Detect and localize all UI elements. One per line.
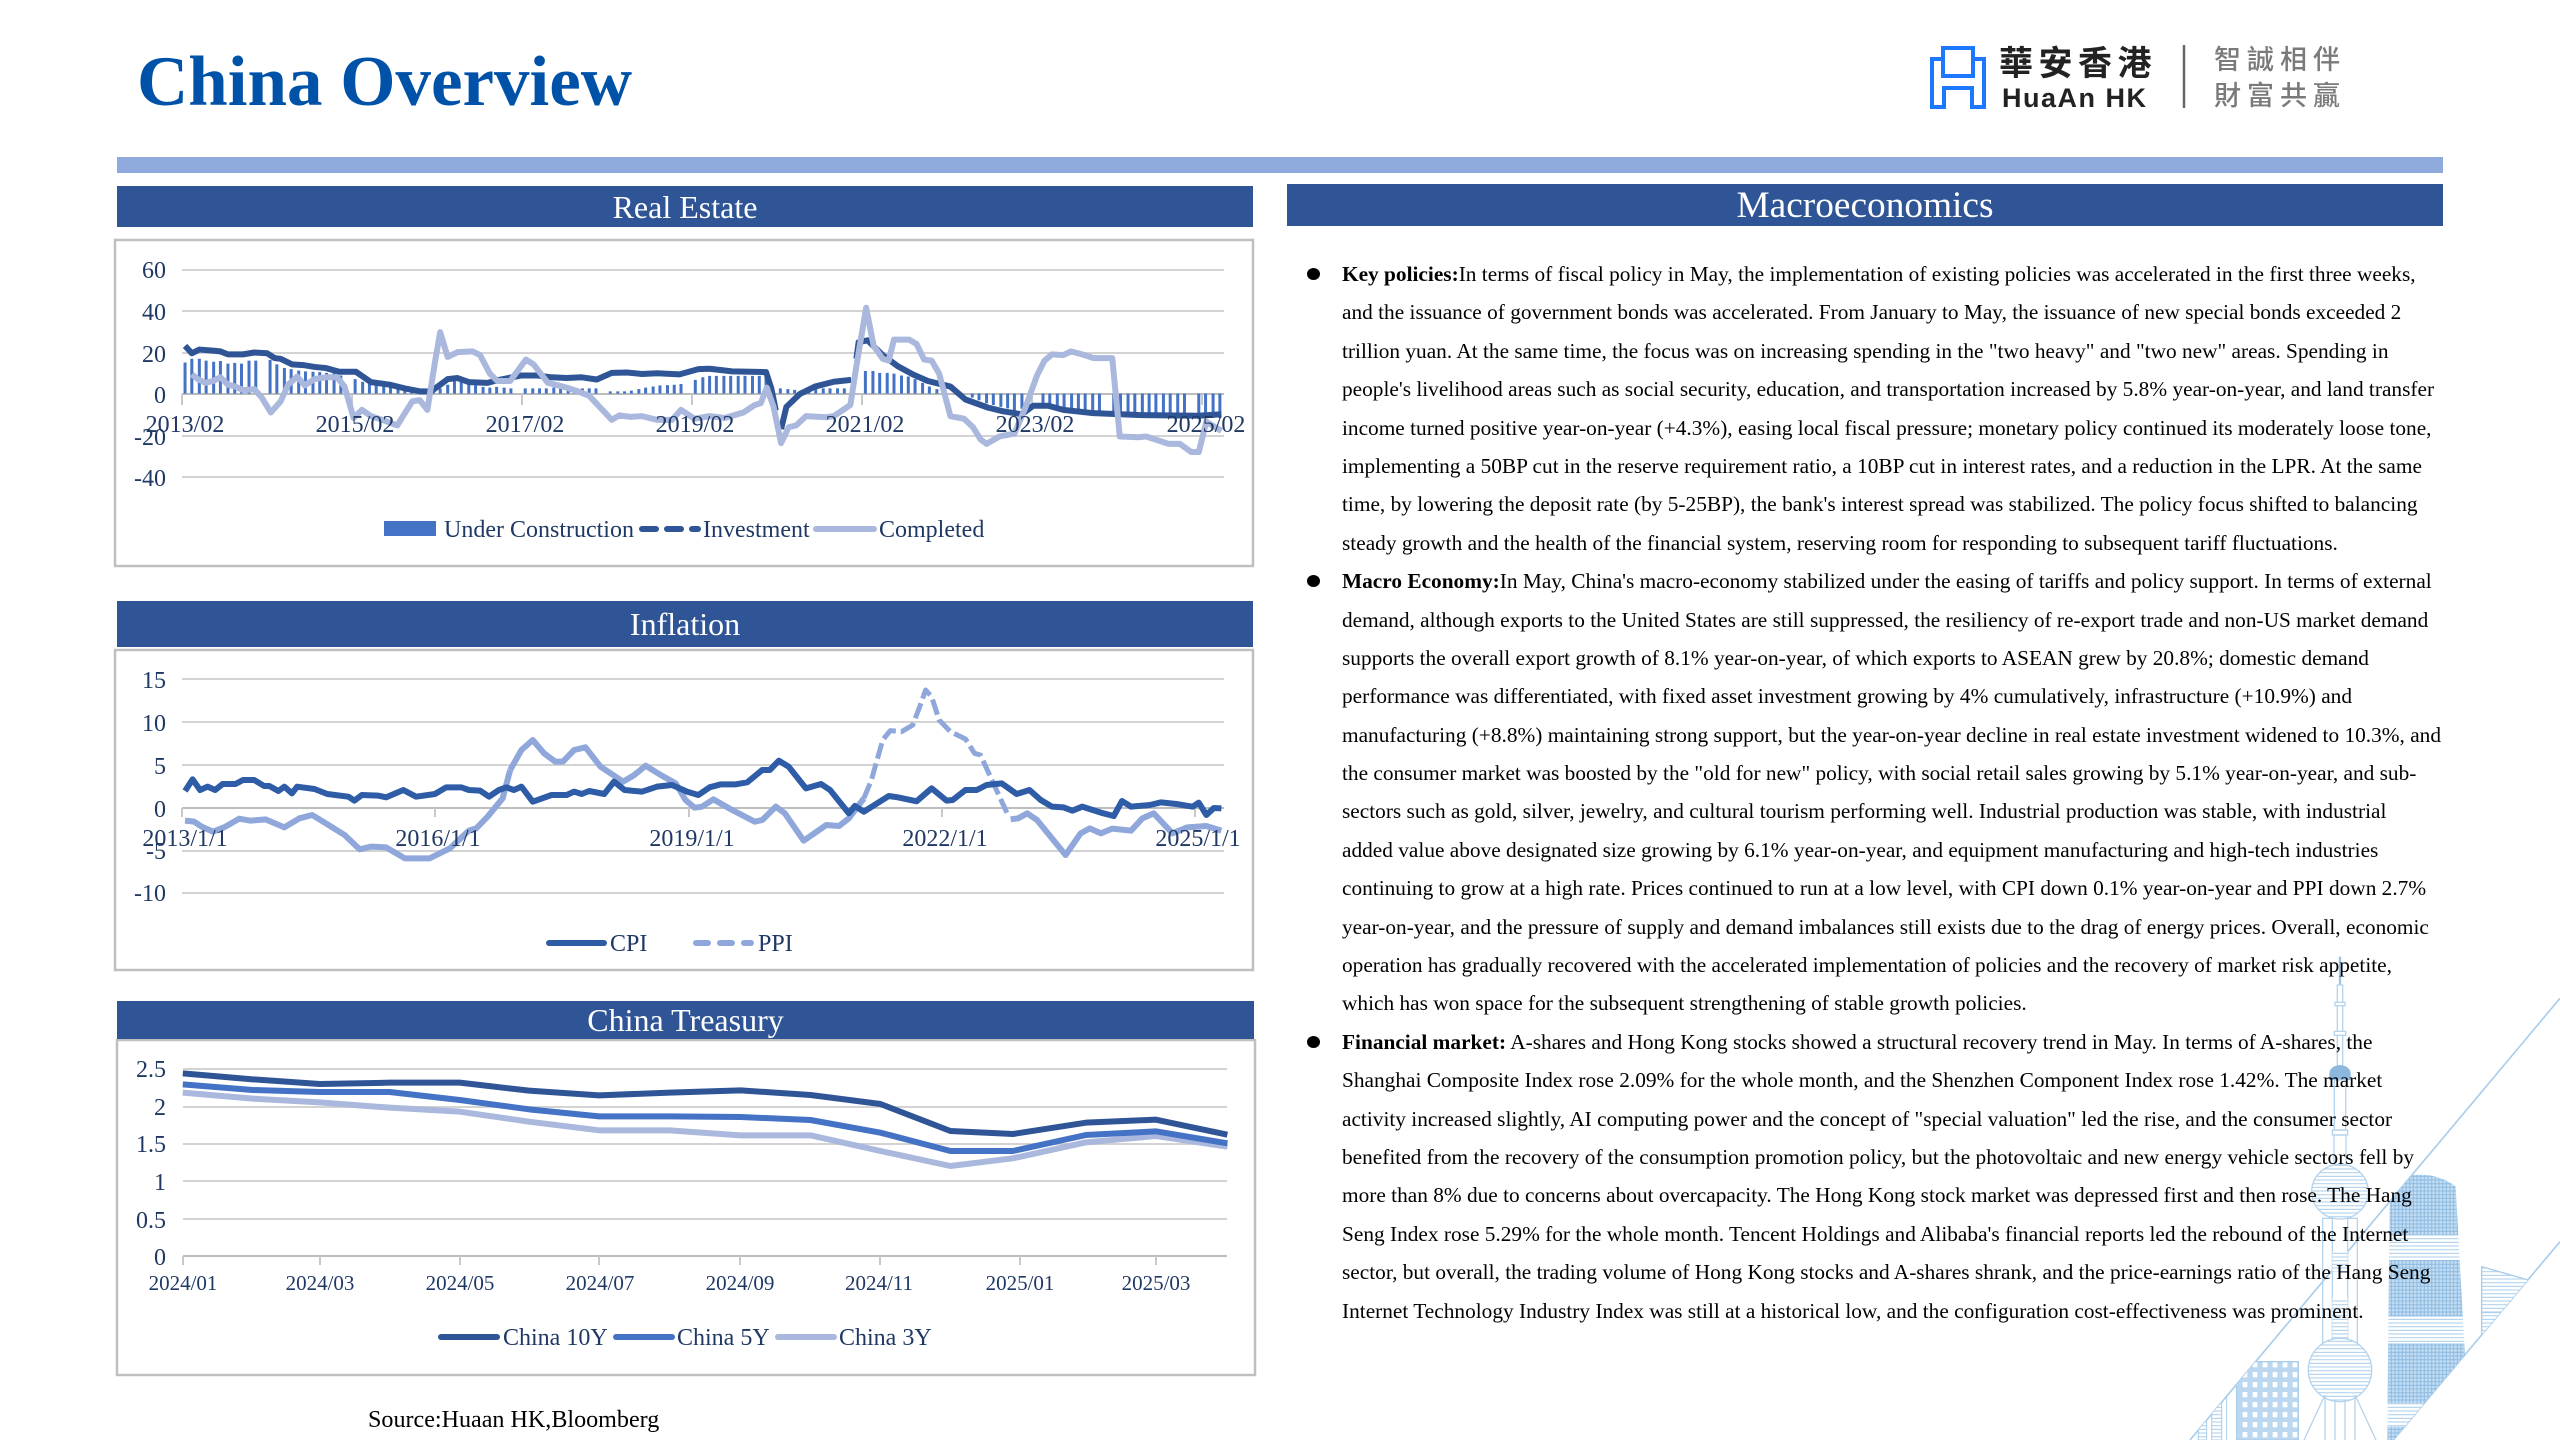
y axis labels — [134, 668, 166, 907]
x axis labels — [142, 826, 1241, 852]
y axis labels: 2.5 — [136, 1057, 166, 1083]
gridlines — [182, 679, 1224, 893]
y axis labels: 0 — [154, 383, 166, 409]
x axis labels — [146, 412, 1245, 438]
paragraph: macro economy: which has won space for the subsequent strengthening of stable growth policies. — [1342, 991, 2027, 1015]
heading: inflation — [117, 601, 1253, 647]
logo: HuaAn HK — [1932, 36, 2346, 113]
legend: China 5Y — [677, 1325, 770, 1351]
gridlines — [183, 1069, 1227, 1265]
paragraph: financial market: Financial market: A-shares and Hong Kong stocks showed a structural recovery trend in May. In terms of A-shares, the — [1342, 1030, 2372, 1054]
heading: China treasury: China Treasury — [587, 1002, 784, 1038]
logo slogan: 財富共贏 — [2214, 74, 2346, 113]
panel: China treasury chart — [117, 1040, 1255, 1375]
y axis labels: 15 — [142, 668, 166, 694]
x axis labels: 2024/11 — [845, 1271, 913, 1295]
x axis labels: 2025/02 — [1167, 412, 1245, 438]
diagonal frame line lower — [2393, 1242, 2560, 1440]
y axis labels: -5 — [146, 839, 166, 865]
paragraph: key policies: trillion yuan. At the same time, the focus was on increasing spending in the "two heavy" and "two new" areas. Spending in — [1342, 339, 2389, 363]
legend: Investment — [703, 517, 810, 543]
x axis labels: 2025/01 — [986, 1271, 1054, 1295]
paragraph: financial market: activity increased slightly, AI computing power and the concept of "special valuation" led the rise, and the consumer sector — [1342, 1107, 2392, 1131]
x axis labels: 2017/02 — [486, 412, 564, 438]
legend: PPI — [758, 931, 793, 957]
legend: China 3Y — [839, 1325, 932, 1351]
x axis labels: 2025/1/1 — [1155, 826, 1241, 852]
y axis labels: -40 — [134, 466, 166, 492]
x axis labels: 2023/02 — [996, 412, 1074, 438]
paragraph: macro economy: year-on-year, and the pressure of supply and demand imbalances still exists due to the drag of energy prices. Overall, economic — [1342, 915, 2429, 939]
x axis labels: 2013/02 — [146, 412, 224, 438]
paragraph: financial market: Shanghai Composite Index rose 2.09% for the whole month, and the Shenzhen Component Index rose 1.42%. The market — [1342, 1068, 2382, 1092]
x axis labels — [149, 1271, 1190, 1295]
heading: macroeconomics — [1287, 184, 2443, 226]
paragraph: key policies: income turned positive year-on-year (+4.3%), easing local fiscal pressure; monetary policy continued its moderately loose tone, — [1342, 416, 2432, 440]
x axis labels: 2019/02 — [656, 412, 734, 438]
y axis labels: 1 — [154, 1170, 166, 1196]
legend — [384, 517, 984, 543]
paragraph: financial market: sector, but overall, the trading volume of Hong Kong stocks and A-shares shrank, and the price-earnings ratio of the Hang Seng — [1342, 1260, 2430, 1284]
y axis labels: 0 — [154, 1245, 166, 1271]
series: investment — [185, 340, 1221, 429]
paragraph: macro economy: sectors such as gold, silver, jewelry, and cultural tourism performing well. Industrial production was stable, with industrial — [1342, 799, 2386, 823]
title: China Overview — [137, 43, 632, 121]
x axis labels: 2024/09 — [706, 1271, 774, 1295]
paragraph: macro economy: manufacturing (+8.8%) maintaining strong support, but the year-on-year decline in real estate investment widened to 10.3%, and — [1342, 723, 2441, 747]
y axis labels: 1.5 — [136, 1132, 166, 1158]
series: China 10Y — [183, 1073, 1227, 1135]
panel: inflation chart — [115, 650, 1253, 970]
y axis labels: 0.5 — [136, 1208, 166, 1234]
chart frame — [117, 1040, 1255, 1375]
paragraph: financial market: benefited from the recovery of the consumption promotion policy, but the photovoltaic and new energy vehicle sectors fell by — [1342, 1145, 2414, 1169]
diagonal frame line upper — [2190, 998, 2560, 1440]
paragraph: financial market: Internet Technology Industry Index was still at a historical low, and the configuration cost-effectiveness was prominent. — [1342, 1299, 2364, 1323]
legend — [549, 931, 793, 957]
paragraph: macro economy: demand, although exports to the United States are still suppressed, the resiliency of re-export trade and non-US market demand — [1342, 608, 2428, 632]
paragraph: key policies: steady growth and the health of the financial system, reserving room for responding to subsequent tariff fluctuations. — [1342, 531, 2338, 555]
y axis labels: 40 — [142, 300, 166, 326]
paragraph: financial market — [1307, 1030, 2430, 1323]
paragraph: macro economy: continuing to grow at a high rate. Prices continued to run at a low level, with CPI down 0.1% year-on-year and PPI down 2.7% — [1342, 876, 2426, 900]
logo slogan: 智誠相伴 — [2214, 38, 2346, 77]
panel: real estate chart — [115, 240, 1253, 566]
heading: inflation: Inflation — [630, 606, 740, 642]
series: completed — [192, 308, 1221, 452]
paragraph: key policies: time, by lowering the deposit rate (by 5-25BP), the bank's interest spread was stabilized. The policy focus shifted to balancing — [1342, 492, 2418, 516]
y axis labels: -10 — [134, 881, 166, 907]
text block: macroeconomics commentary — [1307, 262, 2441, 1323]
y axis labels: 60 — [142, 258, 166, 284]
logo name English: HuaAn HK — [2002, 83, 2148, 113]
x axis labels: 2024/01 — [149, 1271, 217, 1295]
legend: CPI — [610, 931, 647, 957]
x axis labels: 2013/1/1 — [142, 826, 228, 852]
x axis labels: 2022/1/1 — [902, 826, 988, 852]
series: CPI — [185, 761, 1221, 816]
y axis labels: 5 — [154, 754, 166, 780]
x axis labels: 2024/07 — [566, 1271, 634, 1295]
paragraph: financial market: Seng Index rose 5.29% for the whole month. Tencent Holdings and Alibaba's financial reports led the rebound of the Internet — [1342, 1222, 2408, 1246]
paragraph: financial market: more than 8% due to concerns about overcapacity. The Hong Kong stock market was depressed first and then rose. The Hang — [1342, 1183, 2412, 1207]
x axis labels: 2016/1/1 — [395, 826, 481, 852]
paragraph: macro economy: operation has gradually recovered with the accelerated implementation of policies and the recovery of market risk appetite, — [1342, 953, 2392, 977]
y axis labels: -20 — [134, 425, 166, 451]
x axis labels: 2019/1/1 — [649, 826, 735, 852]
paragraph: macro economy: added value above designated size growing by 6.1% year-on-year, and equipment manufacturing and high-tech industries — [1342, 838, 2378, 862]
series: PPI — [185, 690, 1221, 858]
heading: real estate: Real Estate — [613, 189, 757, 225]
y axis labels: 20 — [142, 342, 166, 368]
paragraph: key policies: Key policies:In terms of fiscal policy in May, the implementation of existing policies was accelerated in the first three weeks, — [1342, 262, 2416, 286]
gridlines — [182, 270, 1224, 477]
y axis labels — [134, 258, 166, 492]
building: right small block — [2482, 1267, 2528, 1337]
building: Oriental Pearl tower — [2304, 957, 2376, 1440]
chart frame — [115, 650, 1253, 970]
source note: Source:Huaan HK,Bloomberg — [368, 1407, 659, 1433]
y axis labels — [136, 1057, 166, 1271]
x axis labels: 2021/02 — [826, 412, 904, 438]
x axis labels: 2024/05 — [426, 1271, 494, 1295]
data series — [183, 1073, 1227, 1166]
skyline illustration — [2190, 957, 2560, 1440]
building: left office block — [2198, 1362, 2298, 1440]
logo name Chinese: 華安香港 — [1999, 36, 2157, 85]
paragraph: key policies: people's livelihood areas such as social security, education, and transportation increased by 5.8% year-on-year, and land transfer — [1342, 377, 2434, 401]
legend: Under Construction — [444, 517, 634, 543]
page title rule bar — [117, 157, 2443, 173]
paragraph: macro economy: supports the overall export growth of 8.1% year-on-year, of which exports to ASEAN grew by 20.8%; domestic demand — [1342, 646, 2369, 670]
paragraph: macro economy — [1307, 569, 2441, 1015]
y axis labels: 2 — [154, 1095, 166, 1121]
series: China 3Y — [183, 1093, 1227, 1166]
paragraph: macro economy: performance was differentiated, with fixed asset investment growing by 4% cumulatively, infrastructure (+10.9%) and — [1342, 684, 2352, 708]
paragraph: key policies: and the issuance of government bonds was accelerated. From January to May, the issuance of new special bonds exceeded 2 — [1342, 300, 2401, 324]
paragraph: key policies: implementing a 50BP cut in the reserve requirement ratio, a 10BP cut in interest rates, and a reduction in the LPR. At the same — [1342, 454, 2422, 478]
series: under construction bars — [185, 308, 1221, 452]
y axis labels: 0 — [154, 797, 166, 823]
x axis labels: 2024/03 — [286, 1271, 354, 1295]
y axis labels: 10 — [142, 711, 166, 737]
legend: Completed — [879, 517, 984, 543]
logo divider — [2183, 45, 2185, 108]
data series — [185, 690, 1221, 858]
chart frame — [115, 240, 1253, 566]
paragraph: macro economy: the consumer market was boosted by the "old for new" policy, with social retail sales growing by 5.1% year-on-year, and sub- — [1342, 761, 2416, 785]
heading: macroeconomics: Macroeconomics — [1736, 185, 1994, 226]
legend — [441, 1325, 932, 1351]
paragraph: key policies — [1307, 262, 2434, 555]
logo slogan — [2214, 38, 2346, 113]
heading: real estate — [117, 186, 1253, 227]
legend: China 10Y — [503, 1325, 608, 1351]
x axis labels: 2015/02 — [316, 412, 394, 438]
heading: China treasury — [117, 1001, 1254, 1039]
series: China 5Y — [183, 1084, 1227, 1151]
building: Shanghai Tower — [2387, 1174, 2465, 1440]
paragraph: macro economy: Macro Economy:In May, China's macro-economy stabilized under the easing of tariffs and policy support. In terms of external — [1342, 569, 2432, 593]
logo icon — [1932, 48, 1984, 107]
x axis labels: 2025/03 — [1122, 1271, 1190, 1295]
